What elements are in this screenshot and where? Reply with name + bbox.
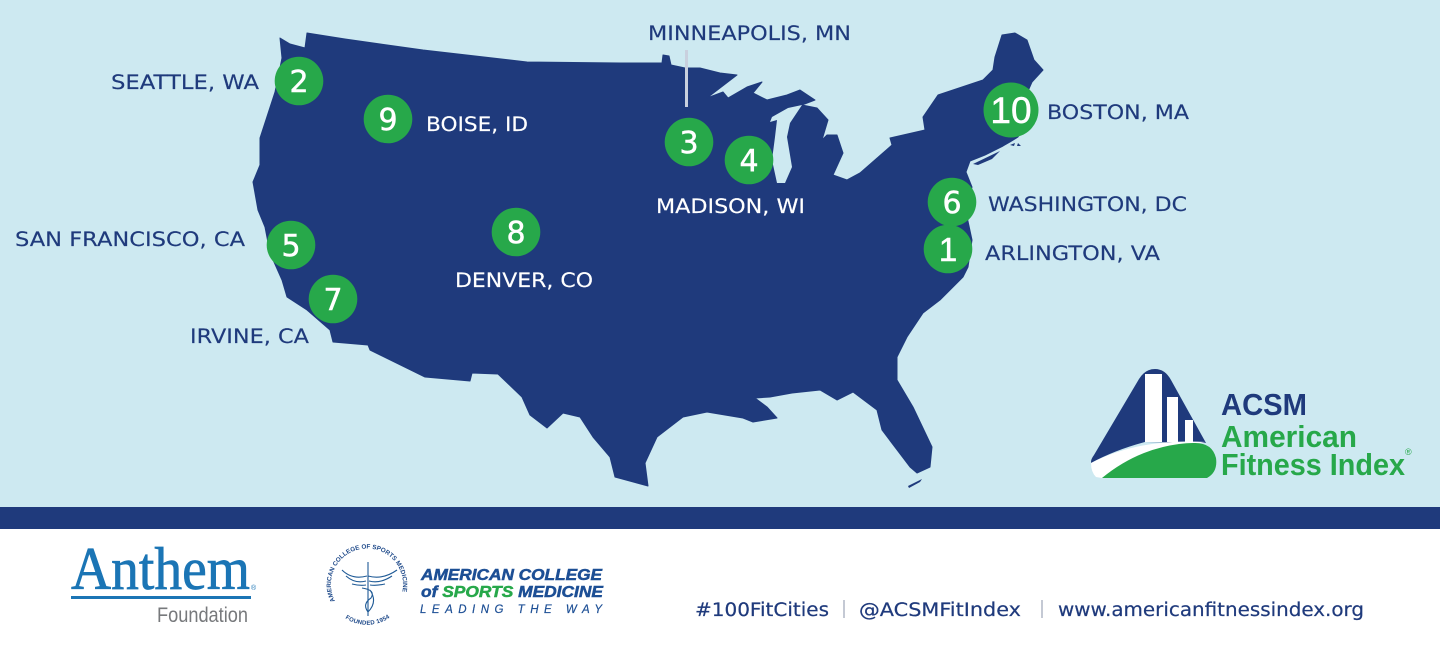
marker 2: Seattle	[275, 57, 323, 105]
label: Madison: MADISON, WI	[656, 195, 805, 218]
Lake Michigan	[770, 105, 802, 183]
marker 2: Seattle: 2	[289, 65, 309, 100]
marker 4: Madison: 4	[739, 144, 759, 179]
Minneapolis leader line	[685, 50, 688, 107]
navy divider band	[0, 507, 1440, 529]
marker 10: Boston: 10	[990, 90, 1032, 131]
marker 9: Boise: 9	[378, 103, 398, 138]
marker 4: Madison	[725, 136, 773, 184]
marker 1: Arlington	[924, 225, 972, 273]
logo text: American: American	[1221, 419, 1357, 454]
marker 5: San Francisco	[267, 221, 315, 269]
label: Boston: BOSTON, MA	[1047, 101, 1190, 124]
logo registered mark: ®	[1405, 447, 1412, 457]
label: Seattle: SEATTLE, WA	[111, 71, 260, 94]
label: Minneapolis: MINNEAPOLIS, MN	[648, 22, 851, 45]
Long Island	[973, 151, 1000, 165]
footer: hashtag: #100FitCities	[695, 600, 829, 621]
marker 5: San Francisco: 5	[281, 229, 301, 264]
white footer panel	[0, 529, 1440, 645]
marker 9: Boise	[364, 95, 412, 143]
ACSM name line 2: of SPORTS MEDICINE	[421, 584, 604, 601]
marker 6: Washington	[928, 178, 976, 226]
Florida Keys	[908, 479, 922, 488]
Anthem registered mark: ®	[251, 584, 257, 592]
Cape Cod islands	[1010, 143, 1021, 146]
label: Irvine: IRVINE, CA	[190, 325, 310, 348]
marker 3: Minneapolis: 3	[679, 126, 699, 161]
marker 8: Denver	[492, 208, 540, 256]
ACSM circular seal: AMERICAN COLLEGE OF SPORTS MEDICINE	[326, 544, 408, 602]
logo icon: city skyline and hill	[1091, 369, 1216, 478]
marker 1: Arlington: 1	[939, 231, 957, 268]
label: Boise: BOISE, ID	[426, 113, 528, 136]
footer: website: www.americanfitnessindex.org	[1058, 600, 1364, 621]
marker 3: Minneapolis	[665, 118, 713, 166]
logo text: ACSM: ACSM	[1221, 387, 1307, 422]
marker 6: Washington: 6	[942, 186, 962, 221]
Anthem wordmark: Anthem	[71, 536, 250, 602]
Anthem Foundation logo	[71, 536, 257, 627]
label: San Francisco: SAN FRANCISCO, CA	[15, 228, 246, 251]
Anthem underline	[71, 596, 251, 599]
ACSM tagline: LEADING THE WAY	[420, 604, 603, 616]
label: Washington: WASHINGTON, DC	[988, 193, 1187, 216]
footer: twitter handle: @ACSMFitIndex	[859, 600, 1021, 621]
logo text: Fitness Index: Fitness Index	[1221, 447, 1406, 482]
ACSM American Fitness Index logo	[1091, 369, 1412, 482]
Foundation wordmark: Foundation	[157, 604, 248, 627]
American College of Sports Medicine logo	[326, 544, 604, 625]
label: Arlington: ARLINGTON, VA	[985, 242, 1161, 265]
marker 7: Irvine: 7	[323, 283, 343, 318]
marker 7: Irvine	[309, 275, 357, 323]
sky-blue background	[0, 0, 1440, 507]
ACSM name line 1: AMERICAN COLLEGE	[420, 567, 603, 584]
marker 10: Boston	[984, 82, 1038, 138]
map of the United States	[253, 33, 1043, 488]
ACSM circular seal: FOUNDED 1954	[346, 614, 390, 625]
label: Denver: DENVER, CO	[455, 269, 593, 292]
marker 8: Denver: 8	[506, 216, 526, 251]
